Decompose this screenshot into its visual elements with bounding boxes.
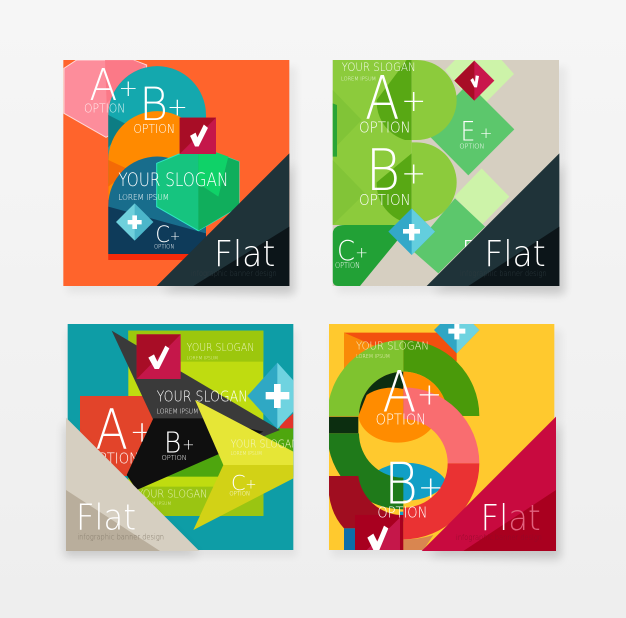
panel: teal banner bbox=[63, 324, 307, 557]
tagline: infographic banner design bbox=[191, 269, 277, 278]
corner triangle bbox=[422, 417, 556, 551]
option A: OPTION bbox=[88, 450, 139, 467]
check badge bbox=[137, 334, 181, 379]
corner triangle bbox=[427, 153, 559, 286]
dark arrow bbox=[112, 331, 280, 490]
check badge bbox=[180, 118, 216, 154]
plus E: + bbox=[480, 124, 492, 142]
slogan: YOUR SLOGAN bbox=[118, 170, 228, 191]
plus B: + bbox=[401, 156, 426, 191]
option A: OPTION bbox=[84, 102, 125, 116]
pink ring bbox=[403, 387, 479, 463]
flat title: Flat bbox=[484, 234, 546, 275]
corner triangle shadow bbox=[433, 163, 563, 295]
option A: OPTION bbox=[376, 410, 426, 428]
option E: OPTION bbox=[459, 141, 484, 150]
letter C: C bbox=[155, 223, 170, 248]
tagline: infographic banner design bbox=[456, 533, 542, 542]
letter B: B bbox=[164, 426, 181, 459]
corner triangle dark bbox=[463, 490, 556, 551]
yellow arrow bbox=[193, 400, 293, 530]
letter A: A bbox=[382, 360, 416, 426]
dark red arc bbox=[329, 476, 400, 528]
option C: OPTION bbox=[154, 244, 174, 251]
plus A: + bbox=[130, 415, 154, 449]
lorem top: LOREM IPSUM bbox=[187, 356, 218, 362]
letter B: B bbox=[366, 137, 400, 204]
check diamond bbox=[454, 61, 494, 101]
plus A: + bbox=[119, 74, 138, 102]
lorem center: LOREM IPSUM bbox=[157, 407, 198, 415]
plus B: + bbox=[182, 436, 194, 453]
letter A: A bbox=[89, 60, 117, 111]
lorem bottom: LOREM IPSUM bbox=[140, 501, 171, 507]
panel: green banner bbox=[333, 60, 567, 295]
tagline: infographic banner design bbox=[460, 269, 547, 278]
corner triangle bbox=[66, 418, 199, 551]
letter D: D bbox=[462, 234, 483, 267]
option C: OPTION bbox=[229, 490, 250, 497]
flat title: Flat bbox=[76, 497, 136, 538]
panel: yellow banner bbox=[327, 307, 562, 560]
plus B: + bbox=[418, 470, 444, 505]
lorem: LOREM IPSUM bbox=[356, 354, 390, 360]
plus diamond bbox=[247, 362, 294, 429]
plus diamond bbox=[116, 203, 153, 241]
plus B: + bbox=[167, 93, 188, 122]
panel: orange banner bbox=[63, 60, 297, 295]
plus C: + bbox=[170, 228, 180, 243]
letter C: C bbox=[231, 471, 246, 495]
plus C: + bbox=[355, 243, 368, 261]
check badge bbox=[355, 515, 404, 550]
letter A: A bbox=[365, 63, 400, 133]
lower-left ring bbox=[327, 433, 403, 509]
plus diamond bbox=[388, 208, 435, 255]
flat title: Flat bbox=[214, 234, 275, 275]
slogan arrow: YOUR SLOGAN bbox=[231, 437, 298, 450]
option B: OPTION bbox=[359, 191, 411, 209]
top diamond bbox=[434, 324, 480, 354]
option B: OPTION bbox=[377, 503, 427, 521]
slogan: YOUR SLOGAN bbox=[342, 60, 416, 74]
option A: OPTION bbox=[359, 119, 411, 137]
lorem: LOREM IPSUM bbox=[118, 193, 169, 202]
option C: OPTION bbox=[335, 261, 360, 270]
option B: OPTION bbox=[133, 122, 175, 136]
plus A: + bbox=[401, 84, 426, 119]
upper ring bbox=[327, 340, 479, 416]
option B: OPTION bbox=[162, 453, 187, 462]
lorem arrow: LOREM IPSUM bbox=[231, 451, 262, 457]
tagline: infographic banner design bbox=[77, 533, 164, 542]
corner triangle dark bbox=[193, 227, 289, 286]
letter C: C bbox=[337, 234, 355, 267]
plus C: + bbox=[245, 477, 257, 492]
plus A: + bbox=[416, 377, 442, 412]
slogan bottom: YOUR SLOGAN bbox=[137, 487, 207, 500]
letter E: E bbox=[461, 117, 475, 148]
letter A: A bbox=[95, 397, 128, 461]
slogan top: YOUR SLOGAN bbox=[187, 341, 254, 354]
slogan: YOUR SLOGAN bbox=[356, 339, 429, 352]
corner triangle dark bbox=[468, 227, 559, 286]
corner triangle shadow bbox=[163, 163, 293, 295]
letter B: B bbox=[139, 78, 168, 131]
slogan center: YOUR SLOGAN bbox=[157, 388, 248, 406]
green hexagon bbox=[157, 146, 239, 231]
lorem: LOREM IPSUM bbox=[341, 77, 376, 83]
corner triangle bbox=[157, 153, 289, 286]
corner triangle shadow bbox=[428, 423, 560, 560]
red ring bbox=[403, 463, 479, 539]
corner triangle dark bbox=[66, 490, 160, 551]
flat title: Flat bbox=[481, 498, 541, 539]
letter B: B bbox=[384, 451, 418, 517]
corner triangle shadow bbox=[63, 422, 200, 557]
